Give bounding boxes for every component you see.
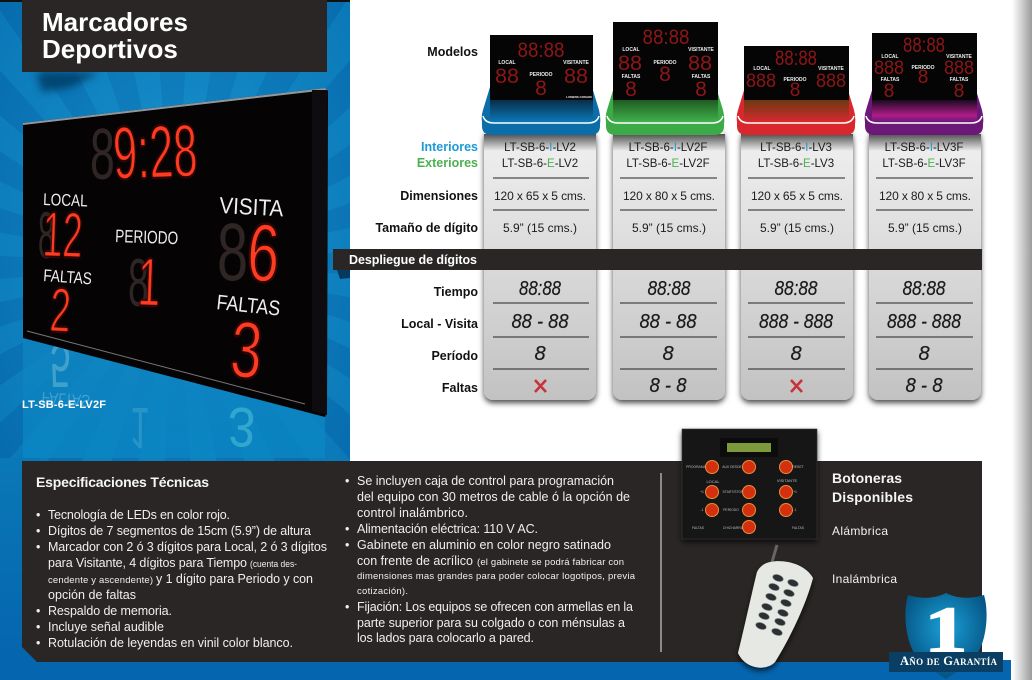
mini scoreboard: 88 bbox=[688, 52, 712, 75]
icon: wired control box: START/STOP bbox=[723, 490, 744, 494]
mini scoreboard: FALTAS bbox=[881, 77, 900, 83]
unlit digit blocks bbox=[38, 114, 248, 321]
board labels: FALTAS bbox=[215, 291, 281, 321]
board labels: PERIODO bbox=[115, 227, 179, 249]
top dark edge bbox=[0, 0, 350, 2]
warranty badge: 1 bbox=[925, 593, 967, 667]
model caption: LT-SB-6-E-LV2F bbox=[22, 399, 106, 411]
mini scoreboard: 888 bbox=[944, 58, 974, 79]
specs: LT-SB-6-I-LV2F bbox=[629, 142, 707, 154]
specification list left: Dígitos de 7 segmentos de 15cm (5.9”) de altura bbox=[48, 524, 311, 538]
mini scoreboard bbox=[872, 33, 977, 102]
specification list left: Marcador con 2 ó 3 dígitos para Local, 2 ó 3 dígitos bbox=[48, 540, 327, 554]
mini scoreboard: 8 bbox=[659, 63, 671, 86]
scoreboard reflection bbox=[23, 331, 325, 459]
mini scoreboard: LUMENS.COM.MX bbox=[566, 95, 592, 99]
icon: wired control box: -1 bbox=[793, 508, 797, 512]
mini scoreboard: 888 bbox=[816, 71, 846, 92]
specs: LT-SB-6-E-LV2 bbox=[502, 158, 578, 170]
row labels: Faltas bbox=[442, 381, 478, 395]
mini scoreboard: 8 bbox=[918, 67, 928, 88]
card body bbox=[741, 128, 853, 400]
specs: 5.9” (15 cms.) bbox=[632, 221, 706, 235]
specs: LT-SB-6-I-LV3 bbox=[760, 142, 832, 154]
mini scoreboard: 88:88 bbox=[518, 39, 564, 62]
icon: wired control box: FALTAS bbox=[692, 526, 705, 530]
specs bbox=[620, 142, 717, 397]
specs: 120 x 80 x 5 cms. bbox=[879, 189, 971, 203]
card body bbox=[613, 128, 725, 400]
mini scoreboard: VISITANTE bbox=[688, 47, 715, 53]
mini scoreboard: PERIODO bbox=[911, 65, 935, 71]
specification list left: opción de faltas bbox=[48, 588, 136, 602]
specification list right: • bbox=[345, 538, 349, 552]
icon: wired control box: -1 bbox=[700, 508, 704, 512]
row labels: Exteriores bbox=[417, 156, 478, 170]
specification list right: control inalámbrico. bbox=[357, 506, 468, 520]
specs: 888 - 888 bbox=[759, 311, 833, 333]
mini scoreboard: 8 bbox=[954, 81, 964, 102]
specification list right: cotización). bbox=[357, 586, 408, 597]
icon: wired control box: PERIODO bbox=[723, 508, 739, 512]
mini scoreboard bbox=[744, 46, 849, 101]
panel: technical specifications bbox=[22, 461, 982, 662]
board labels bbox=[43, 191, 284, 321]
specification list right: • bbox=[345, 600, 349, 614]
local digits: 12 bbox=[42, 198, 84, 271]
specs: 88:88 bbox=[902, 278, 946, 300]
specification list left: • bbox=[36, 540, 40, 554]
mini scoreboard: FALTAS bbox=[622, 74, 641, 80]
left blue margin beside specifications bbox=[0, 458, 40, 662]
card body bbox=[484, 128, 596, 400]
period digit: 1 bbox=[136, 243, 162, 320]
dock bbox=[606, 87, 724, 135]
specification list left: • bbox=[36, 508, 40, 522]
unlit digit blocks: 8 bbox=[217, 206, 248, 298]
specification list left bbox=[36, 508, 327, 650]
title: Marcadores bbox=[42, 7, 188, 37]
specs: 8 bbox=[662, 343, 674, 365]
specs: LT-SB-6-I-LV3F bbox=[885, 142, 963, 154]
specification list left: (cuenta des- bbox=[250, 559, 297, 570]
specification list right: parte superior para su colgado o con ménsulas a bbox=[357, 616, 625, 630]
model column 1 bbox=[482, 35, 600, 400]
row labels: Modelos bbox=[427, 45, 478, 59]
visitor digit: 6 bbox=[245, 206, 282, 299]
heading: available controllers bbox=[832, 470, 913, 505]
local fouls digit: 2 bbox=[48, 275, 73, 345]
mini scoreboard: LOCAL bbox=[753, 66, 771, 72]
mini scoreboard: 88 bbox=[495, 65, 519, 88]
specs: 120 x 65 x 5 cms. bbox=[751, 189, 843, 203]
mini scoreboard: LOCAL bbox=[498, 60, 516, 66]
specification list right: dimensiones mas grandes para poder colocar logotipos, previa bbox=[357, 571, 636, 582]
warranty badge: Año de Garantía bbox=[900, 654, 998, 668]
visitor fouls digit: 3 bbox=[228, 303, 265, 396]
specs: 120 x 65 x 5 cms. bbox=[494, 189, 586, 203]
label: wired: Alámbrica bbox=[832, 524, 888, 538]
specs: 5.9” (15 cms.) bbox=[503, 221, 577, 235]
row labels: Período bbox=[431, 349, 478, 363]
mini scoreboard: 8 bbox=[884, 81, 894, 102]
unlit digit blocks: 8 bbox=[128, 244, 149, 321]
board labels: FALTAS bbox=[43, 267, 92, 289]
model column 2 bbox=[606, 22, 725, 400]
mini scoreboard: LOCAL bbox=[881, 54, 899, 60]
specification list right: Se incluyen caja de control para programación bbox=[357, 474, 614, 488]
model column 3 bbox=[737, 46, 855, 400]
mini scoreboard bbox=[613, 22, 718, 101]
model column 4 bbox=[865, 33, 983, 400]
specs: 8 - 8 bbox=[906, 375, 942, 397]
mini scoreboard: 88:88 bbox=[642, 26, 690, 49]
specs: 8 bbox=[790, 343, 802, 365]
mini scoreboard: VISITANTE bbox=[818, 66, 845, 72]
specification list left: Tecnología de LEDs en color rojo. bbox=[48, 508, 230, 522]
specs: 88:88 bbox=[774, 278, 818, 300]
board labels: LOCAL bbox=[43, 191, 88, 211]
specs bbox=[748, 142, 845, 369]
specification list left: • bbox=[36, 524, 40, 538]
specification list right: Alimentación eléctrica: 110 V AC. bbox=[357, 522, 538, 536]
specs bbox=[876, 142, 973, 397]
specs bbox=[493, 142, 589, 369]
mini scoreboard: 88 bbox=[564, 65, 588, 88]
mini scoreboard: 8 bbox=[790, 80, 800, 101]
mini scoreboard: PERIODO bbox=[783, 77, 807, 83]
icon: wired control box: LOCAL bbox=[706, 479, 720, 484]
row labels: Interiores bbox=[421, 140, 478, 154]
mini scoreboard: LOCAL bbox=[622, 47, 640, 53]
heading: available controllers: Disponibles bbox=[832, 489, 913, 505]
specs: 88:88 bbox=[648, 278, 690, 300]
title fold shadow bbox=[36, 72, 100, 92]
dock bbox=[865, 87, 983, 135]
mini scoreboard: VISITANTE bbox=[563, 60, 590, 66]
mini scoreboard: FALTAS bbox=[950, 77, 969, 83]
heading: available controllers: Botoneras bbox=[832, 470, 902, 486]
dock bbox=[737, 87, 855, 135]
board labels: VISITA bbox=[219, 192, 284, 222]
icon: wired control box: +1 bbox=[793, 490, 797, 494]
heading: specifications: Especificaciones Técnicas bbox=[36, 474, 209, 490]
mini scoreboard: 8 bbox=[535, 77, 547, 100]
row labels bbox=[375, 45, 479, 395]
mini scoreboard: 888 bbox=[874, 58, 904, 79]
row labels: Tiempo bbox=[434, 285, 478, 299]
icon: not available bbox=[535, 380, 546, 392]
specs: 5.9” (15 cms.) bbox=[760, 221, 834, 235]
specification list left: • bbox=[36, 604, 40, 618]
icon: wireless remote bbox=[738, 545, 813, 668]
mini scoreboard: VISITANTE bbox=[946, 54, 973, 60]
specs: LT-SB-6-E-LV3F bbox=[882, 158, 966, 170]
mini scoreboard: 888 bbox=[746, 71, 776, 92]
specification list right: Gabinete en aluminio en color negro satinado bbox=[357, 538, 611, 552]
specs: 888 - 888 bbox=[887, 311, 961, 333]
icon: wired control box: VISITANTE bbox=[777, 478, 798, 483]
icon: wired control box: PROGRAMA bbox=[686, 465, 707, 469]
bottom blue band bbox=[0, 660, 1011, 680]
unlit digit blocks: 8 bbox=[38, 199, 55, 272]
icon: wired control box: AUX DESDE bbox=[722, 465, 743, 469]
row labels: Tamaño de dígito bbox=[375, 221, 478, 235]
page right gutter shadow bbox=[1012, 0, 1032, 680]
specification list right: con frente de acrílico bbox=[357, 554, 473, 568]
specification list right: Fijación: Los equipos se ofrecen con armellas en la bbox=[357, 600, 633, 614]
icon: wired control box: +1 bbox=[700, 490, 704, 494]
specification list right: (el gabinete se podrá fabricar con bbox=[477, 557, 624, 568]
mini scoreboard: 88:88 bbox=[903, 34, 945, 57]
row labels: Dimensiones bbox=[400, 189, 478, 203]
title bbox=[22, 0, 327, 72]
specification list left: Rotulación de leyendas en vinil color blanco. bbox=[48, 636, 293, 650]
mini scoreboard: 88 bbox=[618, 52, 642, 75]
mini scoreboard: 8 bbox=[695, 78, 707, 101]
specification list right: los lados para colocarlo a pared. bbox=[357, 631, 534, 645]
icon: wired control box: FALTAS bbox=[792, 526, 805, 530]
mini scoreboard: 8 bbox=[625, 78, 637, 101]
mini scoreboard: FALTAS bbox=[692, 74, 711, 80]
panel: blue ray background bbox=[0, 0, 350, 470]
specs: 88 - 88 bbox=[640, 311, 696, 333]
specification list left: y 1 dígito para Periodo y con bbox=[156, 572, 313, 586]
card body bbox=[869, 128, 981, 400]
mini scoreboard: 88:88 bbox=[775, 47, 817, 70]
specification list left: para Visitante, 4 dígitos para Tiempo bbox=[48, 556, 247, 570]
specs: LT-SB-6-E-LV3 bbox=[758, 158, 834, 170]
specs: LT-SB-6-E-LV2F bbox=[626, 158, 710, 170]
scoreboard reflection: 1 bbox=[130, 395, 149, 459]
specs: LT-SB-6-I-LV2 bbox=[504, 142, 576, 154]
digit display section bar: Despliegue de dígitos bbox=[349, 253, 477, 267]
specs: 8 bbox=[534, 343, 546, 365]
title: Deportivos bbox=[42, 34, 178, 64]
clock digits: 9:28 bbox=[112, 109, 199, 195]
specification list left: cendente y ascendente) bbox=[48, 575, 153, 586]
specs: 5.9” (15 cms.) bbox=[888, 221, 962, 235]
specs: 8 - 8 bbox=[650, 375, 686, 397]
specification list left: • bbox=[36, 636, 40, 650]
icon: not available bbox=[791, 380, 802, 392]
specs: 8 bbox=[918, 343, 930, 365]
specification list left: Respaldo de memoria. bbox=[48, 604, 172, 618]
mini scoreboard: PERIODO bbox=[529, 72, 553, 78]
specification list left: Incluye señal audible bbox=[48, 620, 164, 634]
icon: wired control box bbox=[682, 429, 817, 539]
scoreboard reflection: 5 bbox=[50, 331, 71, 400]
specification list right bbox=[345, 474, 636, 645]
dock bbox=[482, 87, 600, 135]
icon: wired control box: CHICHARRA bbox=[723, 526, 744, 530]
specs: 88 - 88 bbox=[512, 311, 568, 333]
specs: 88:88 bbox=[519, 278, 561, 300]
scoreboard reflection: FALTAS bbox=[41, 388, 91, 410]
warranty badge bbox=[889, 593, 1003, 679]
specification list left: • bbox=[36, 620, 40, 634]
row labels: Local - Visita bbox=[401, 317, 479, 331]
specification list right: del equipo con 30 metros de cable ó la opción de bbox=[357, 490, 630, 504]
mini scoreboard bbox=[490, 35, 593, 100]
unlit digit blocks: 8 bbox=[90, 114, 115, 195]
specification list right: • bbox=[345, 474, 349, 488]
specs: 120 x 80 x 5 cms. bbox=[623, 189, 715, 203]
scoreboard reflection: 3 bbox=[228, 395, 255, 458]
scoreboard photo bbox=[23, 88, 328, 417]
mini scoreboard: PERIODO bbox=[653, 60, 677, 66]
specification list right: • bbox=[345, 522, 349, 536]
digit display section bar bbox=[333, 249, 982, 279]
label: wireless: Inalámbrica bbox=[832, 572, 897, 586]
icon: wired control box: RESET bbox=[792, 465, 804, 469]
